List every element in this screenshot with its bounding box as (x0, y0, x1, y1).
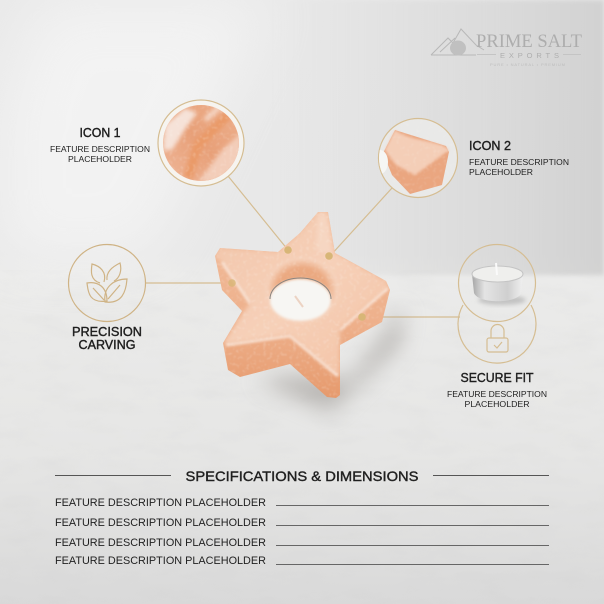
callout: icon 2 (372, 118, 569, 198)
logo: Prime Salt Exports: EXPORTS (500, 51, 559, 60)
secure fit description: FEATURE DESCRIPTION (447, 389, 547, 399)
secure fit description: PLACEHOLDER (464, 399, 530, 409)
star top face (216, 212, 390, 396)
star shadow (255, 305, 405, 412)
specifications panel (55, 468, 549, 567)
leaf icon circle (68, 244, 146, 322)
tealight (270, 279, 331, 321)
star body side (215, 212, 390, 398)
specification rows: FEATURE DESCRIPTION PLACEHOLDER (55, 497, 266, 509)
precision carving heading: PRECISION (72, 325, 142, 339)
callout: precision carving (68, 244, 146, 352)
product: star salt candle holder (210, 205, 405, 412)
specification rows: FEATURE DESCRIPTION PLACEHOLDER (55, 517, 266, 529)
specifications heading: SPECIFICATIONS & DIMENSIONS (186, 468, 418, 484)
callout: icon 1 (50, 100, 244, 186)
secure fit description (447, 389, 547, 409)
logo: Prime Salt Exports: PRIME SALT (476, 32, 582, 52)
icon 1 marble circle (158, 100, 244, 186)
icon 2 star tip circle (372, 118, 458, 198)
logo: Prime Salt Exports: PURE • NATURAL • PREMIUM (490, 62, 565, 67)
specification rows (55, 497, 549, 567)
precision carving heading: CARVING (78, 338, 136, 352)
icon 2 description: PLACEHOLDER (469, 167, 533, 177)
precision carving heading (72, 325, 142, 352)
connector lines (145, 176, 460, 317)
icon 1 description (50, 144, 150, 164)
logo: Prime Salt Exports (431, 29, 582, 67)
icon 1 description: PLACEHOLDER (68, 154, 132, 164)
connector dots (228, 246, 366, 321)
icon 1 heading: ICON 1 (80, 126, 121, 140)
callout: secure fit (447, 244, 547, 409)
lock circle (458, 305, 536, 363)
icon 1 description: FEATURE DESCRIPTION (50, 144, 150, 154)
specification rows: FEATURE DESCRIPTION PLACEHOLDER (55, 555, 266, 567)
icon 2 heading: ICON 2 (469, 139, 511, 153)
specification rows: FEATURE DESCRIPTION PLACEHOLDER (55, 537, 266, 549)
tealight circle (458, 244, 536, 322)
icon 2 description: FEATURE DESCRIPTION (469, 157, 569, 167)
secure fit heading: SECURE FIT (460, 371, 534, 385)
candle recess (270, 261, 334, 300)
icon 2 description (469, 157, 569, 177)
